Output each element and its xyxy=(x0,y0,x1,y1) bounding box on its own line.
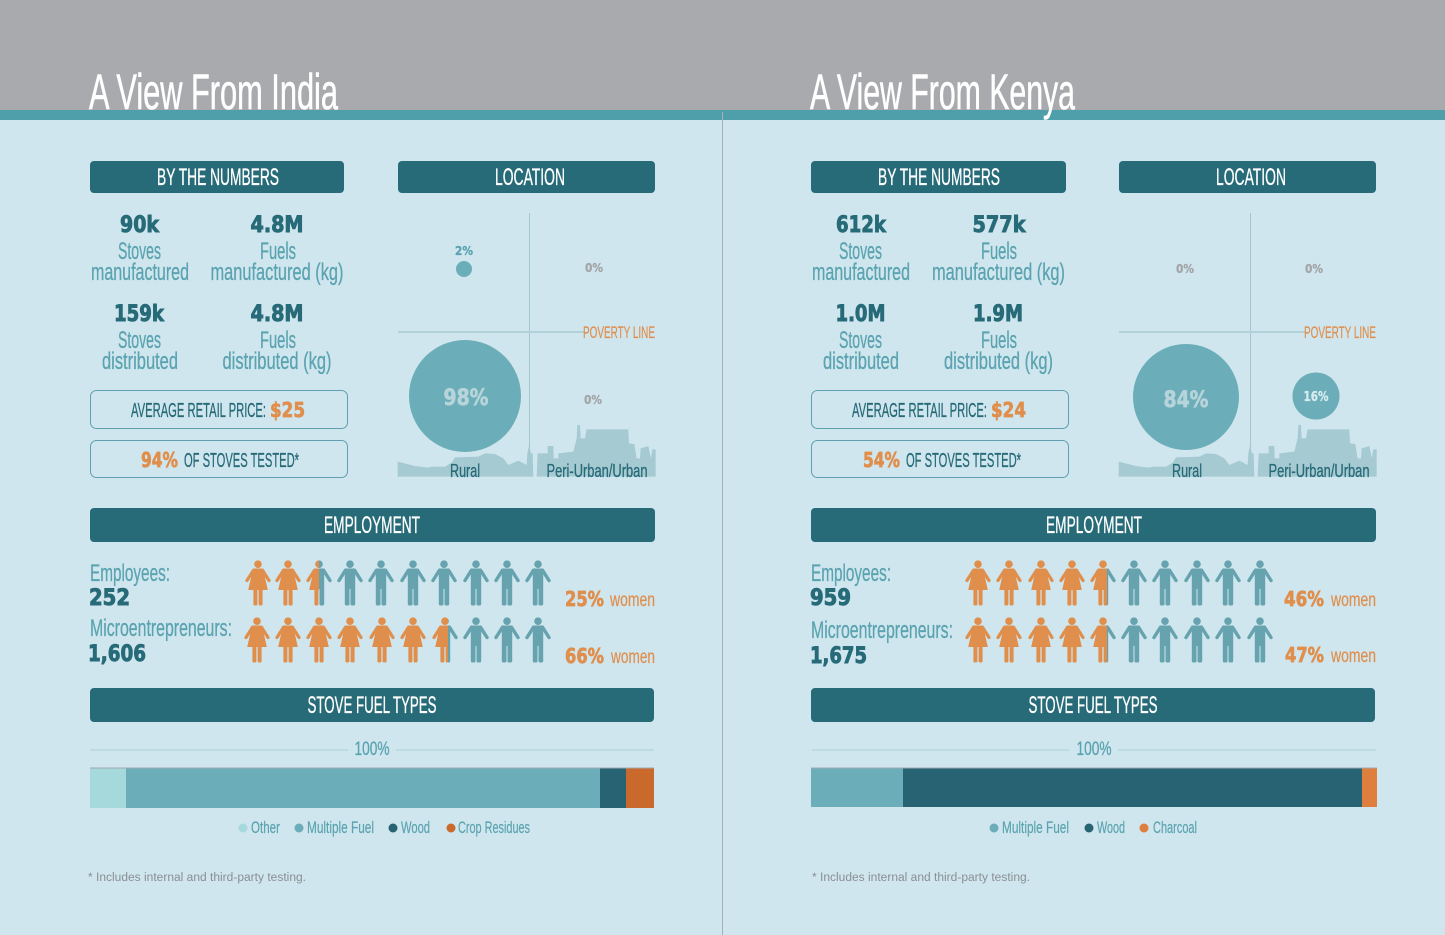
callout: stoves tested: OF STOVES TESTED* xyxy=(906,450,1021,472)
legend: Charcoal xyxy=(1153,818,1197,837)
stat: fuels distributed: Fuels xyxy=(981,327,1017,354)
heading: stove fuel types xyxy=(811,688,1375,722)
stat: fuels distributed: 1.9M xyxy=(973,302,1023,327)
value: 46% women xyxy=(1284,587,1376,611)
stat: fuels distributed: 4.8M xyxy=(250,302,304,327)
value: 47% women xyxy=(1285,643,1376,667)
panel: India xyxy=(88,64,656,884)
heading: employment xyxy=(90,508,655,542)
stat: fuels distributed: distributed (kg) xyxy=(944,348,1053,375)
label: employees: Employees: xyxy=(811,560,891,587)
legend: Multiple Fuel xyxy=(1002,818,1069,837)
stat: stoves distributed xyxy=(102,302,178,375)
bubble: 16% xyxy=(1292,372,1340,420)
bubble: 2% xyxy=(455,244,473,277)
panel: stove fuel types India xyxy=(90,688,654,837)
value: 0% upper left: 0% xyxy=(1176,262,1194,276)
value: 47% women: 47% xyxy=(1285,643,1324,667)
label: microentrepreneurs: 1,675 xyxy=(810,644,867,669)
label: rural: Rural xyxy=(450,461,480,481)
callout: average retail price: $25 xyxy=(270,398,305,422)
panel: location India xyxy=(398,161,656,481)
stat: fuels manufactured: 577k xyxy=(972,213,1027,238)
bubble: 2%: 2% xyxy=(455,244,473,258)
heading: by the numbers: BY THE NUMBERS xyxy=(157,164,279,191)
heading: location: LOCATION xyxy=(495,164,565,191)
label: poverty line: POVERTY LINE xyxy=(1304,323,1376,342)
pictogram: microentrepreneurs 47% women xyxy=(967,617,1271,662)
footnote: * Includes internal and third-party testing. xyxy=(88,872,306,884)
legend: Multiple Fuel xyxy=(307,818,374,837)
heading: location xyxy=(1119,161,1376,193)
panel: Kenya xyxy=(810,64,1377,884)
panel: stove fuel types Kenya xyxy=(811,688,1377,837)
pictogram: employees 25% women xyxy=(247,560,549,606)
value: 25% women: 25% xyxy=(565,587,604,611)
label: microentrepreneurs xyxy=(810,617,953,669)
value: 66% women xyxy=(565,644,655,668)
value: 66% women: 66% xyxy=(565,644,604,668)
stat: stoves manufactured: manufactured xyxy=(812,259,910,286)
stat: fuels manufactured xyxy=(932,213,1065,286)
top grey banner xyxy=(0,0,1445,110)
stat: stoves manufactured xyxy=(812,213,910,286)
stat: stoves distributed xyxy=(823,302,899,375)
value: 46% women: women xyxy=(1330,590,1376,611)
bubble: 84%: 84% xyxy=(1164,388,1208,413)
heading: employment: EMPLOYMENT xyxy=(1046,512,1142,539)
label: poverty line: POVERTY LINE xyxy=(583,323,655,342)
legend: Crop Residues xyxy=(458,818,530,837)
panel: location Kenya xyxy=(1119,161,1377,481)
label: employees xyxy=(810,560,891,611)
value: 47% women: women xyxy=(1330,646,1376,667)
stat: fuels distributed xyxy=(944,302,1053,375)
bubble: 98%: 98% xyxy=(444,386,488,411)
stat: stoves distributed: 159k xyxy=(114,302,165,327)
value: 46% women: 46% xyxy=(1284,587,1324,611)
legend: Wood xyxy=(401,818,430,837)
heading: location xyxy=(398,161,655,193)
callout: stoves tested: OF STOVES TESTED* xyxy=(184,450,299,472)
callout: average retail price: AVERAGE RETAIL PRICE: xyxy=(131,400,266,422)
stat: stoves distributed: Stoves xyxy=(118,327,161,354)
heading: employment xyxy=(811,508,1376,542)
stat: fuels manufactured: 4.8M xyxy=(250,213,304,238)
pictogram: employees 46% women xyxy=(967,560,1271,606)
heading: location: LOCATION xyxy=(1216,164,1286,191)
panel: by the numbers India xyxy=(90,161,348,478)
panel: by the numbers Kenya xyxy=(811,161,1068,478)
label: employees xyxy=(89,560,170,611)
teal band xyxy=(0,110,1445,120)
value: 0% lower: 0% xyxy=(584,393,602,407)
label: peri-urban: Peri-Urban/Urban xyxy=(546,461,648,481)
label: microentrepreneurs: Microentrepreneurs: xyxy=(90,615,232,642)
stat: fuels manufactured: Fuels xyxy=(981,238,1017,265)
label: 100%: 100% xyxy=(354,739,390,760)
stat: fuels manufactured: manufactured (kg) xyxy=(932,259,1065,286)
bubble: 16%: 16% xyxy=(1304,390,1328,405)
stat: stoves manufactured: 90k xyxy=(120,213,160,238)
title: A View From India: A View From India xyxy=(89,64,338,120)
title: A View From Kenya: A View From Kenya xyxy=(810,64,1075,120)
stat: fuels distributed: Fuels xyxy=(260,327,296,354)
callout: stoves tested xyxy=(812,440,1068,478)
callout: average retail price xyxy=(90,390,348,428)
bubble: 98% xyxy=(409,340,521,452)
bubble: 84% xyxy=(1133,344,1239,450)
stat: stoves distributed: 1.0M xyxy=(836,302,886,327)
value: 25% women: women xyxy=(609,590,655,611)
label: microentrepreneurs: 1,606 xyxy=(88,642,146,667)
pictogram: microentrepreneurs 66% women xyxy=(246,617,549,662)
value: 0% upper right: 0% xyxy=(1305,262,1323,276)
label: employees: 252 xyxy=(89,586,130,611)
heading: by the numbers xyxy=(811,161,1066,193)
callout: average retail price: AVERAGE RETAIL PRICE: xyxy=(852,400,987,422)
heading: stove fuel types: STOVE FUEL TYPES xyxy=(1028,692,1158,719)
stat: stoves manufactured: manufactured xyxy=(91,259,189,286)
stacked bar xyxy=(811,768,1377,807)
panel: employment Kenya xyxy=(810,508,1376,669)
label: rural: Rural xyxy=(1172,461,1202,481)
legend: Other xyxy=(251,818,280,837)
skyline xyxy=(398,425,656,477)
stat: fuels distributed xyxy=(222,302,332,375)
heading: by the numbers xyxy=(90,161,344,193)
stat: stoves distributed: distributed xyxy=(823,348,899,375)
value: 66% women: women xyxy=(610,647,655,668)
label: employees: 959 xyxy=(810,586,851,611)
label: microentrepreneurs xyxy=(88,615,232,667)
label: peri-urban: Peri-Urban/Urban xyxy=(1268,461,1370,481)
value: 0% upper: 0% xyxy=(585,261,603,275)
stat: stoves manufactured xyxy=(91,213,189,286)
callout: stoves tested xyxy=(90,440,348,478)
legend xyxy=(990,818,1197,837)
stat: stoves distributed: distributed xyxy=(102,348,178,375)
stat: fuels manufactured xyxy=(210,213,344,286)
callout: stoves tested: 54% xyxy=(863,448,900,472)
stat: stoves distributed: Stoves xyxy=(839,327,882,354)
stat: fuels distributed: distributed (kg) xyxy=(222,348,332,375)
heading: by the numbers: BY THE NUMBERS xyxy=(878,164,1000,191)
stacked bar xyxy=(90,768,654,808)
stat: fuels manufactured: Fuels xyxy=(260,238,296,265)
label: 100%: 100% xyxy=(1076,739,1112,760)
panel: employment India xyxy=(88,508,655,668)
value: 25% women xyxy=(565,587,655,611)
callout: average retail price xyxy=(812,390,1068,428)
heading: stove fuel types xyxy=(90,688,654,722)
stat: stoves manufactured: 612k xyxy=(836,213,887,238)
legend xyxy=(238,818,530,837)
legend: Wood xyxy=(1097,818,1125,837)
callout: stoves tested: 94% xyxy=(141,448,178,472)
callout: average retail price: $24 xyxy=(991,398,1026,422)
label: employees: Employees: xyxy=(90,560,170,587)
stat: fuels manufactured: manufactured (kg) xyxy=(210,259,344,286)
heading: employment: EMPLOYMENT xyxy=(324,512,420,539)
stat: stoves manufactured: Stoves xyxy=(839,238,882,265)
skyline xyxy=(1119,425,1377,477)
heading: stove fuel types: STOVE FUEL TYPES xyxy=(308,692,436,719)
footnote: * Includes internal and third-party testing. xyxy=(812,872,1030,884)
label: microentrepreneurs: Microentrepreneurs: xyxy=(811,617,953,644)
stat: stoves manufactured: Stoves xyxy=(118,238,161,265)
